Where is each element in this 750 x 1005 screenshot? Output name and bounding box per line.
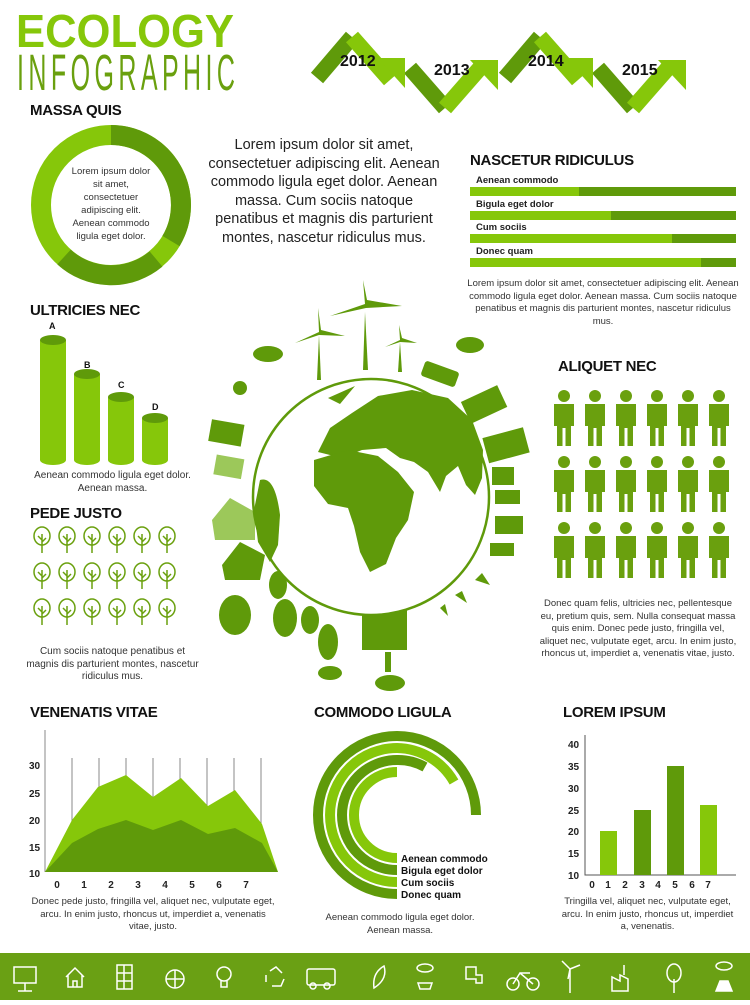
donut chart: Lorem ipsum dolor: [72, 166, 150, 177]
bar chart: 40: [568, 740, 580, 751]
area chart: 7: [243, 880, 249, 891]
area chart: 2: [108, 880, 114, 891]
text: pede justo: Cum sociis natoque penatibus et magnis dis parturient montes, nascetur ridiculus mus.: [26, 646, 199, 682]
buildings right: [461, 385, 507, 424]
cylinder chart: [40, 321, 168, 465]
progress bars: Cum sociis: [476, 222, 527, 233]
timeline arrows: 2014: [528, 53, 564, 70]
tree grid: [33, 526, 176, 625]
progress bars: Aenean commodo: [476, 175, 558, 186]
heading: massa quis: MASSA QUIS: [30, 102, 121, 119]
cylinder chart: C: [118, 380, 125, 390]
wind turbines: [363, 312, 368, 370]
center paragraph: Lorem ipsum dolor sit amet, consectetuer adipiscing elit. Aenean commodo ligula eget dolor. Aenean massa. Cum sociis natoque penatibus et magnis dis parturient montes, nascetur ridiculus mus.: [208, 137, 440, 246]
donut chart: Aenean commodo: [72, 218, 150, 229]
heading: nascetur ridiculus: NASCETUR RIDICULUS: [470, 152, 634, 169]
timeline arrows: 2012: [340, 53, 376, 70]
area chart: 6: [216, 880, 222, 891]
clouds: [253, 346, 283, 362]
heading: aliquet nec: ALIQUET NEC: [558, 358, 656, 375]
radial chart: Bigula eget dolor: [401, 866, 483, 877]
people grid: [554, 390, 729, 578]
donut chart: sit amet,: [93, 179, 129, 190]
cylinder chart: B: [84, 360, 91, 370]
area chart: 15: [29, 843, 41, 854]
area chart: 20: [29, 816, 41, 827]
text: commodo: Aenean commodo ligula eget dolor. Aenean massa.: [326, 912, 474, 936]
radial chart: Cum sociis: [401, 878, 455, 889]
radial chart: Donec quam: [401, 890, 461, 901]
area chart: 4: [162, 880, 168, 891]
bar chart: 15: [568, 849, 580, 860]
bar chart: [568, 735, 736, 890]
bar chart: 20: [568, 827, 580, 838]
heading: pede justo: PEDE JUSTO: [30, 505, 122, 522]
text: lorem ipsum: Tringilla vel, aliquet nec, vulputate eget, arcu. In enim justo, rhoncus ut, imperdiet a, venenatis.: [562, 896, 733, 932]
globe: [253, 379, 489, 615]
heading: venenatis vitae: VENENATIS VITAE: [30, 704, 157, 721]
area chart: 0: [54, 880, 60, 891]
cylinder chart: A: [49, 321, 56, 331]
ferns: [440, 573, 490, 616]
timeline arrows: 2015: [622, 62, 658, 79]
bar chart: 10: [568, 871, 580, 882]
heading: commodo ligula: COMMODO LIGULA: [314, 704, 451, 721]
progress bars: Bigula eget dolor: [476, 199, 554, 210]
globe illustration: [208, 280, 530, 691]
radial chart: [313, 731, 488, 901]
text: aliquet: Donec quam felis, ultricies nec, pellentesque eu, pretium quis, sem. Nulla consequat massa quis enim. Donec pede justo, fringilla vel, aliquet nec, vulputate eget, arcu. In enim justo, rhoncus ut, imperdiet a, venenatis vitae, justo.: [540, 598, 736, 659]
solar: [208, 419, 244, 447]
progress bars: [470, 175, 736, 267]
bar chart: 30: [568, 784, 580, 795]
cylinder chart: D: [152, 402, 159, 412]
heading: lorem ipsum: LOREM IPSUM: [563, 704, 666, 721]
houses: [212, 498, 255, 540]
donut chart: ligula eget dolor.: [76, 231, 146, 242]
text: nascetur: Lorem ipsum dolor sit amet, consectetuer adipiscing elit. Aenean commodo ligula eget dolor. Aenean massa. Cum sociis natoque penatibus et magnis dis parturient montes, nascetur ridiculus mus.: [467, 278, 739, 326]
title: [16, 6, 235, 96]
footer icon bar: [0, 953, 750, 1000]
donut chart: adipiscing elit.: [81, 205, 141, 216]
area chart: [29, 730, 278, 891]
area chart: 3: [135, 880, 141, 891]
bar chart: 25: [568, 806, 580, 817]
trees bottom: [269, 571, 287, 599]
timeline arrows: 2013: [434, 62, 470, 79]
bus: [420, 360, 460, 388]
text: ultricies: Aenean commodo ligula eget dolor. Aenean massa.: [34, 470, 191, 494]
progress bars: Donec quam: [476, 246, 533, 257]
area chart: 5: [189, 880, 195, 891]
factory bottom: [362, 610, 407, 650]
bar chart: 35: [568, 762, 580, 773]
text: venenatis: Donec pede justo, fringilla vel, aliquet nec, vulputate eget, arcu. In enim justo, rhoncus ut, imperdiet a, venenatis vitae, justo.: [32, 896, 274, 932]
area chart: 30: [29, 761, 41, 772]
timeline arrows: [311, 32, 686, 114]
title: ECOLOGY: [16, 6, 234, 57]
area chart: 25: [29, 789, 41, 800]
donut chart: consectetuer: [84, 192, 138, 203]
area chart: 10: [29, 869, 41, 880]
donut chart: [31, 125, 191, 286]
radial chart: Aenean commodo: [401, 854, 488, 865]
heading: ultricies nec: ULTRICIES NEC: [30, 302, 140, 319]
area chart: 1: [81, 880, 87, 891]
